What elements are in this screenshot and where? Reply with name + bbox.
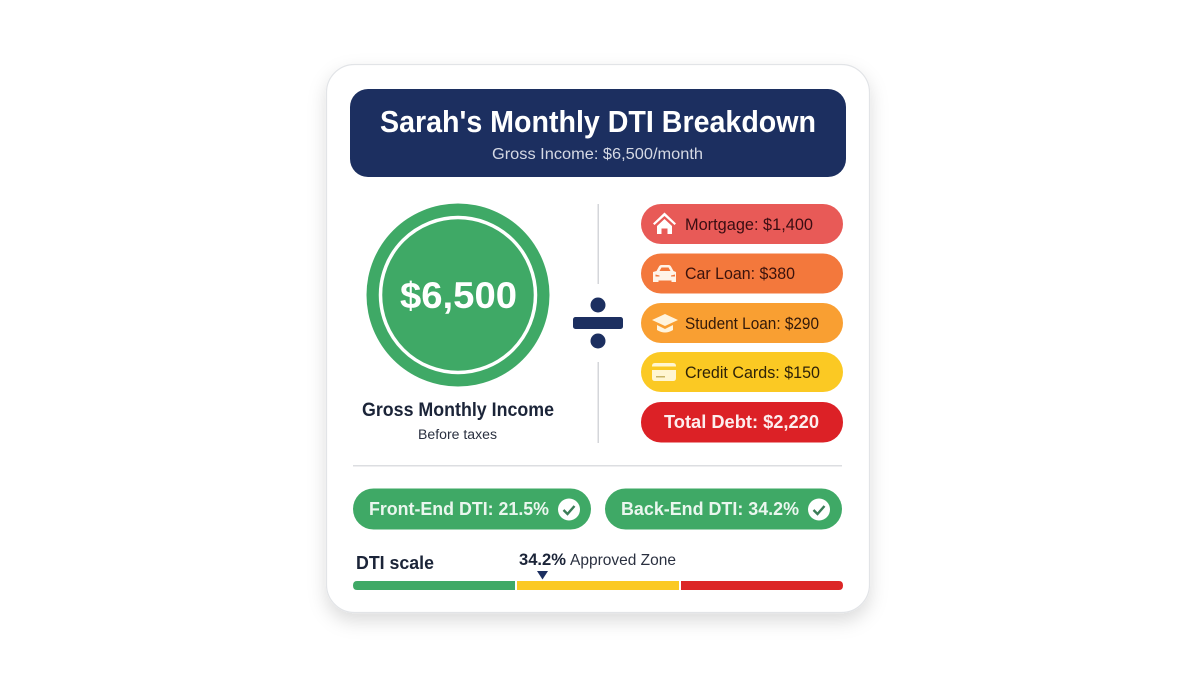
- pill: total debt: [641, 402, 843, 442]
- income circle: [366, 204, 550, 386]
- title: Sarah's Monthly DTI Breakdown: [380, 104, 816, 139]
- DTI scale bar: [353, 581, 843, 590]
- horizontal divider: [353, 465, 842, 466]
- icon: car: [653, 265, 676, 282]
- pill: student loan: Student Loan: $290: [685, 315, 819, 333]
- pill: credit cards: Credit Cards: $150: [685, 364, 820, 382]
- pill: car loan: [641, 254, 843, 294]
- icon: house: [653, 212, 676, 234]
- income circle: $6,500: [400, 275, 517, 316]
- badge: back-end DTI: [605, 488, 842, 530]
- vertical divider bottom: [598, 362, 599, 443]
- title banner: [350, 89, 846, 177]
- pill: mortgage: [641, 204, 843, 244]
- scale marker label: 34.2%: [519, 551, 566, 569]
- pill: student loan: [641, 303, 843, 343]
- badge: back-end DTI: Back-End DTI: 34.2%: [621, 499, 799, 519]
- pill: total debt: Total Debt: $2,220: [664, 412, 819, 432]
- card panel: [326, 64, 870, 612]
- scale marker arrow: [537, 571, 548, 580]
- scale marker label: Approved Zone: [570, 552, 676, 569]
- icon: credit card: [652, 363, 676, 381]
- badge: front-end DTI: [353, 488, 591, 530]
- subtitle: Gross Income: $6,500/month: [492, 146, 703, 163]
- vertical divider top: [598, 204, 599, 284]
- icon: check: [558, 498, 580, 520]
- icon: graduation cap: [652, 314, 678, 332]
- scale label: DTI scale: [356, 552, 434, 573]
- pill: mortgage: Mortgage: $1,400: [685, 216, 813, 234]
- income label: Before taxes: [418, 427, 497, 442]
- income label: [362, 400, 554, 442]
- icon: check: [808, 498, 830, 520]
- divide symbol: [573, 298, 623, 348]
- pill: car loan: Car Loan: $380: [685, 265, 795, 283]
- pill: credit cards: [641, 352, 843, 392]
- scale marker label: [519, 551, 676, 569]
- badge: front-end DTI: Front-End DTI: 21.5%: [369, 499, 549, 519]
- income label: Gross Monthly Income: [362, 400, 554, 421]
